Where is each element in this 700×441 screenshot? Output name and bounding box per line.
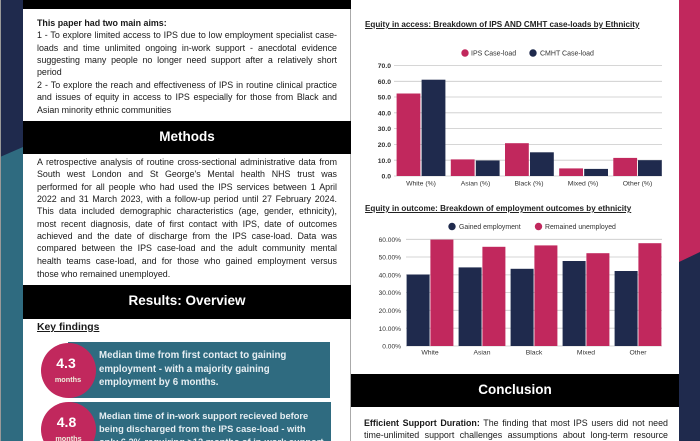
x axis labels: Asian (%) (461, 180, 490, 188)
remained unemployed bars (430, 240, 661, 346)
conclusion text (364, 418, 668, 440)
x axis labels: Black (%) (514, 180, 544, 188)
methods text: health teams case-load, and for those who gained employment versus (37, 256, 337, 266)
CMHT bars (422, 80, 662, 176)
y axis labels: 20.0 (378, 142, 391, 149)
y axis labels: 0.0 (382, 174, 391, 181)
callout: 4.3 months (41, 342, 330, 398)
right decorative stripe (679, 0, 700, 441)
methods text: A retrospective analysis of routine cross-sectional administrative data from (37, 157, 337, 167)
x axis labels: Other (630, 350, 647, 356)
chart heading: equity in outcome: Equity in outcome: Breakdown of employment outcomes by ethnicity (365, 204, 631, 213)
divider line between columns (350, 0, 351, 441)
heading: Conclusion: Conclusion (478, 382, 552, 397)
methods text: achieved and the date of discharge from the IPS case-load. Data was (37, 231, 337, 241)
methods text: South west London and St George's Mental health NHS trust was (37, 169, 337, 179)
y axis labels (378, 63, 391, 181)
aims text: Asian minority ethnic communities (37, 104, 171, 114)
callout: 4.3 months: employment by 6 months. (99, 377, 218, 388)
card background (68, 342, 330, 398)
callout: 4.3 months: employment - with a majority gaining (99, 364, 270, 374)
badge: 4.8 months: 4.8 (57, 414, 76, 430)
heading: Methods (23, 121, 351, 154)
aims text (37, 18, 337, 115)
methods text: 2022 and 31 March 2023, with a follow-up period until 27 February 2024. (37, 194, 337, 204)
legend (461, 49, 594, 58)
callout: 4.8 months (41, 402, 331, 441)
badge: 4.3 months: months (55, 375, 81, 384)
heading: Key findings: Key findings (37, 322, 99, 333)
legend: Gained employment (459, 224, 521, 231)
aims text: 2 - To explore the reach and effectiveness of IPS in routine clinical practice (37, 80, 337, 90)
y axis labels: 60.00% (379, 237, 401, 244)
y axis labels: 10.00% (379, 326, 401, 333)
legend (448, 223, 616, 231)
y axis labels: 30.0 (378, 126, 391, 133)
conclusion text: Efficient Support Duration: The finding that most IPS users did not need (364, 418, 668, 428)
y axis labels: 40.0 (378, 110, 391, 117)
aims text: and issues of equity in access to IPS especially for those from Black and (37, 92, 337, 102)
x axis labels: White (421, 350, 439, 356)
IPS bars (397, 94, 637, 176)
heading: Results Overview (23, 285, 351, 319)
conclusion text: time-unlimited support challenges assumptions about long-term resource (364, 430, 668, 440)
bar chart: employment outcomes (378, 222, 662, 356)
x axis labels: White (%) (406, 180, 436, 188)
y axis labels (379, 237, 401, 350)
methods text: performed for all people who had used the IPS services between 1 April (37, 182, 337, 192)
y axis labels: 50.0 (378, 95, 391, 102)
methods text: those who remained unemployed. (37, 269, 170, 279)
legend: Remained unemployed (545, 224, 616, 231)
gridlines (406, 239, 662, 346)
chart heading: equity in access: Equity in access: Breakdown of IPS AND CMHT case-loads by Ethnicity (365, 20, 640, 29)
methods text: This data included demographic characteristics (age, gender, ethnicity), (37, 206, 337, 216)
y axis labels: 0.00% (382, 344, 401, 350)
panel: aims (37, 18, 337, 115)
heading: Methods: Methods (159, 129, 215, 144)
gridlines (394, 66, 662, 176)
y axis labels: 40.00% (379, 272, 401, 279)
x axis labels: Asian (473, 350, 491, 356)
y axis labels: 60.0 (378, 79, 391, 86)
aims text: This paper had two main aims: (37, 18, 167, 28)
bar chart: IPS and CMHT case-loads (378, 49, 662, 188)
badge: 4.8 months (41, 402, 96, 441)
x axis labels: Other (%) (623, 180, 652, 188)
heading: Conclusion (351, 374, 679, 407)
x axis labels: Mixed (577, 350, 595, 356)
y axis labels: 10.0 (378, 158, 391, 165)
badge: 4.3 months (41, 343, 96, 398)
y axis labels: 30.00% (379, 290, 401, 297)
x axis labels (406, 180, 652, 188)
left decorative stripe (0, 0, 23, 441)
card background (68, 402, 331, 441)
methods text: most recent diagnosis, date of first contact with IPS, date of outcomes (37, 219, 337, 229)
y axis labels: 20.00% (379, 308, 401, 315)
x axis labels: Mixed (%) (568, 180, 598, 188)
aims text: suggesting many people no longer need support after a relatively short (37, 55, 337, 65)
callout: 4.3 months: Median time from first contact to gaining (99, 350, 286, 361)
y axis labels: 50.00% (379, 255, 401, 262)
aims text: 1 - To explore limited access to IPS due to low employment specialist case- (37, 30, 337, 40)
methods text (37, 157, 337, 279)
aims text: loads and time unlimited ongoing in-work support - anecdotal evidence (37, 42, 337, 52)
heading: Results Overview: Results: Overview (128, 293, 246, 308)
legend: IPS Case-load (471, 50, 516, 58)
methods text: compared between the IPS case-load and the adult community mental (37, 243, 337, 253)
aims text: period (37, 67, 62, 77)
top black header bar (23, 0, 351, 9)
legend: CMHT Case-load (540, 50, 594, 58)
y axis labels: 70.0 (378, 63, 391, 70)
x axis labels (421, 350, 647, 356)
callout: 4.8 months: being discharged from the IPS case-load - with (99, 424, 306, 434)
x axis labels: Black (526, 350, 543, 356)
callout: 4.8 months: Median time of in-work support recieved before (99, 411, 308, 421)
badge: 4.3 months: 4.3 (56, 355, 76, 371)
gained employment bars (407, 261, 638, 346)
